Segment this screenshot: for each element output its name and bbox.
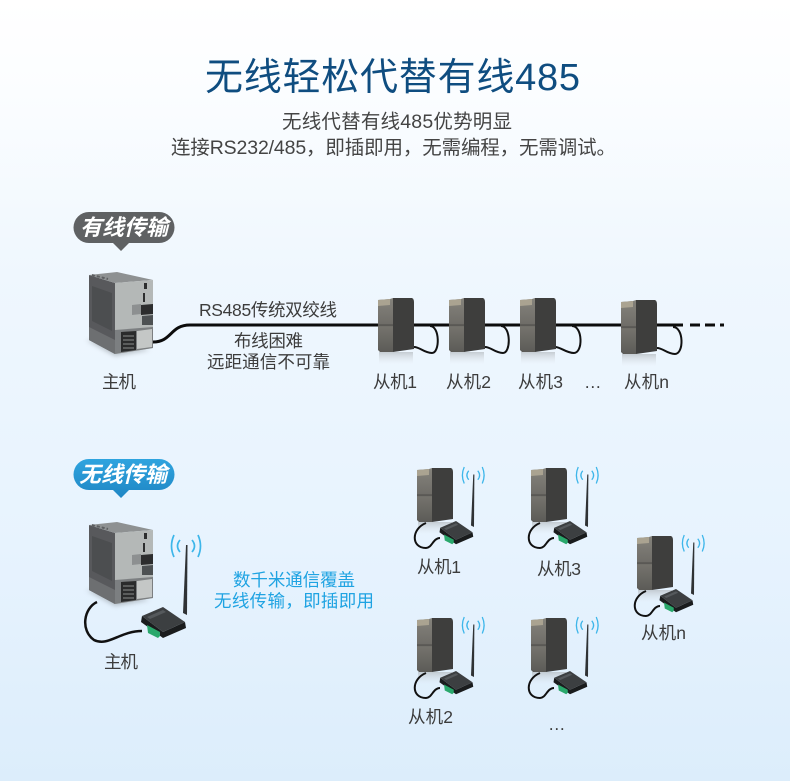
badge: wired [74, 212, 174, 251]
slave 3 [529, 467, 598, 579]
cable label: RS485传统双绞线 [199, 300, 337, 320]
wireless benefits: 无线传输，即插即用 [214, 591, 374, 611]
panel: wireless transmission [74, 459, 704, 734]
wireless benefits [214, 570, 374, 611]
slave n: 从机n [624, 372, 669, 392]
host label: 主机 [102, 372, 136, 392]
ellipsis: … [584, 372, 602, 392]
slave 3: 从机3 [537, 559, 581, 579]
icon: host with radio [85, 522, 200, 642]
bus cable [153, 325, 724, 342]
icon: host controller [86, 272, 153, 356]
slave more: … [548, 714, 566, 734]
slave n: 从机n [641, 623, 686, 643]
slave n [621, 300, 682, 392]
subtitle block: 连接RS232/485，即插即用，无需编程，无需调试。 [171, 137, 616, 159]
slave more [529, 617, 598, 734]
badge: wireless [74, 459, 174, 498]
panel: wired transmission [74, 212, 724, 392]
host label: 主机 [104, 652, 138, 672]
wired drawbacks [207, 331, 330, 372]
wireless benefits: 数千米通信覆盖 [233, 570, 355, 590]
title: 无线轻松代替有线485 [205, 57, 580, 99]
slave 2 [446, 298, 509, 392]
badge: wireless: 无线传输 [79, 462, 171, 487]
wired drawbacks: 布线困难 [234, 331, 303, 351]
wired drawbacks: 远距通信不可靠 [207, 352, 330, 372]
slave 3 [518, 298, 581, 392]
slave 1 [415, 467, 484, 577]
slave 1: 从机1 [417, 557, 461, 577]
slave 1 [373, 298, 438, 392]
slave 1: 从机1 [373, 372, 417, 392]
slave n [635, 535, 704, 643]
slave 3: 从机3 [518, 372, 563, 392]
slave 2: 从机2 [446, 372, 491, 392]
badge: wired: 有线传输 [80, 215, 172, 240]
slave 2: 从机2 [408, 707, 453, 727]
subtitle block: 无线代替有线485优势明显 [282, 111, 512, 133]
subtitle block [171, 111, 616, 159]
slave 2 [408, 617, 484, 727]
